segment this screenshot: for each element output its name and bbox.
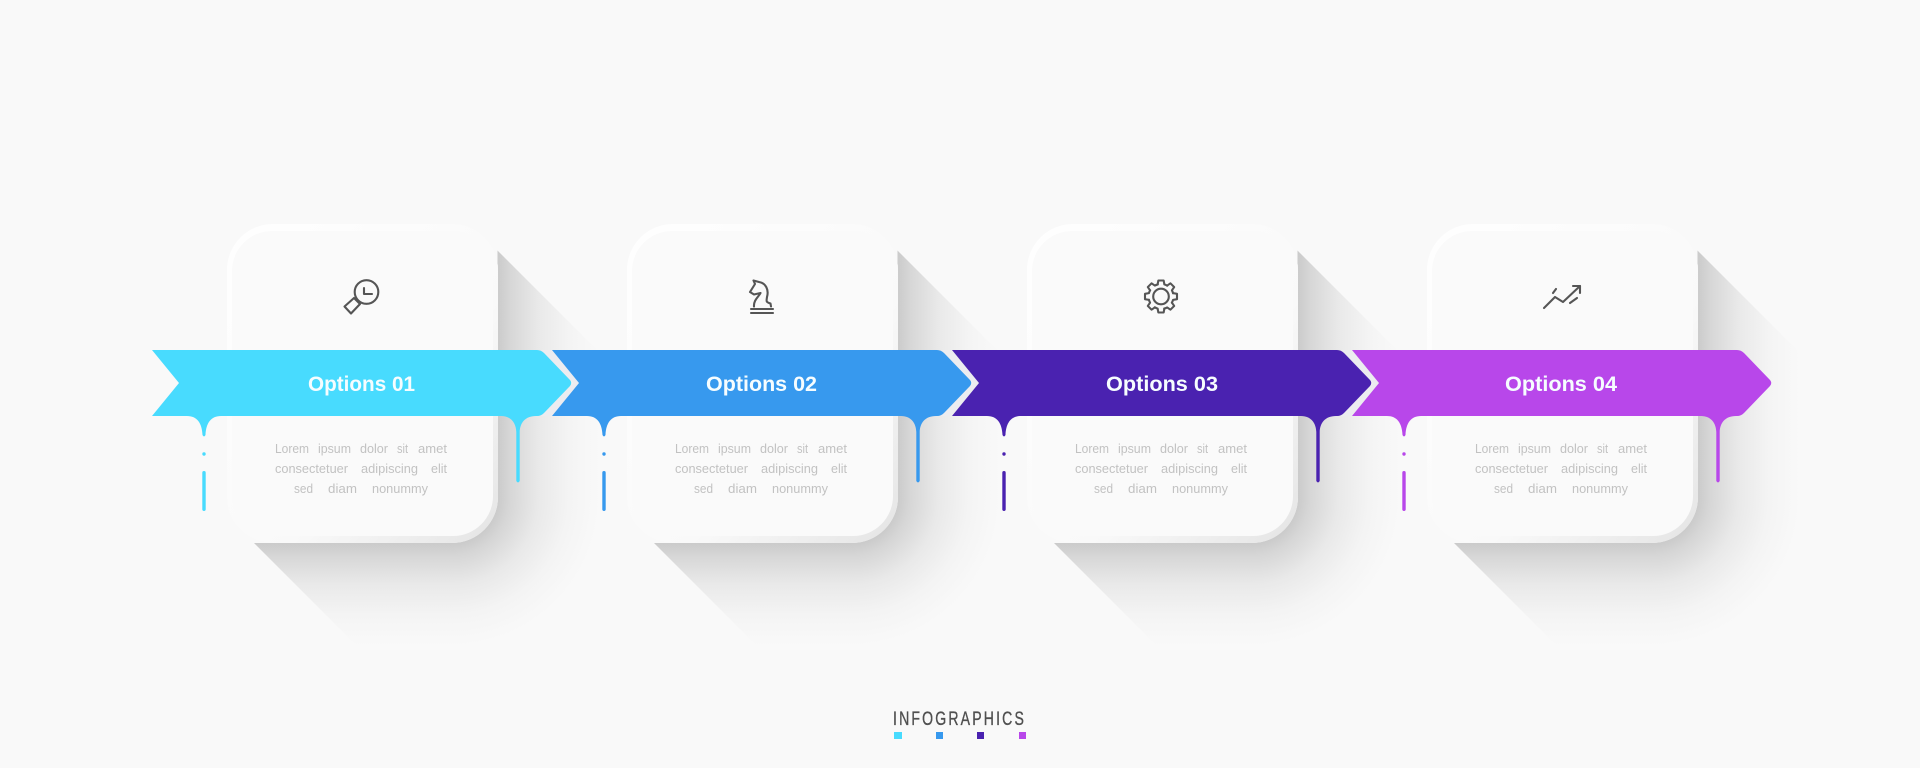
long shadow xyxy=(254,250,600,646)
text block: nonummy xyxy=(372,481,428,496)
icon: trending arrow xyxy=(1544,286,1580,308)
text block: dolor xyxy=(1560,441,1589,456)
connector left xyxy=(1387,416,1421,511)
connector right xyxy=(501,416,536,482)
text block: ipsum xyxy=(1518,441,1551,456)
text block: sit xyxy=(397,441,408,456)
wordmark text: INFOGRAPHICS xyxy=(893,708,1026,730)
text block: Lorem xyxy=(275,441,309,456)
connector right xyxy=(901,416,936,482)
text block: sit xyxy=(797,441,808,456)
panel: options 03 xyxy=(952,224,1400,646)
arrow gap xyxy=(541,350,579,416)
icon: magnifier with clock xyxy=(344,280,378,314)
long shadow xyxy=(1454,250,1800,646)
text block: Lorem xyxy=(675,441,709,456)
legend squares xyxy=(894,732,1026,739)
arrow gap xyxy=(941,350,979,416)
text block: dolor xyxy=(1160,441,1189,456)
text block: diam xyxy=(328,481,357,496)
text block: ipsum xyxy=(1118,441,1151,456)
text block: consectetuer xyxy=(275,461,349,476)
card xyxy=(1427,224,1698,543)
text block: consectetuer xyxy=(1475,461,1549,476)
card xyxy=(1027,224,1298,543)
arrow gap xyxy=(1341,350,1379,416)
text block: amet xyxy=(1218,441,1247,456)
text block: amet xyxy=(818,441,847,456)
text block: ipsum xyxy=(318,441,351,456)
panel: options 04 xyxy=(1352,224,1800,646)
text block: nonummy xyxy=(1172,481,1228,496)
footer: infographics wordmark xyxy=(893,708,1026,739)
text block: adipiscing xyxy=(1561,461,1618,476)
heading: Options 02 xyxy=(706,372,817,396)
text block: dolor xyxy=(360,441,389,456)
ribbon xyxy=(952,350,1371,416)
text block: sed xyxy=(1094,481,1113,496)
long shadow xyxy=(1054,250,1400,646)
text block: consectetuer xyxy=(675,461,749,476)
ribbon xyxy=(552,350,971,416)
card xyxy=(227,224,498,543)
text block: diam xyxy=(728,481,757,496)
text block: sed xyxy=(1494,481,1513,496)
text block: sed xyxy=(694,481,713,496)
text block xyxy=(275,441,447,496)
text block: Lorem xyxy=(1075,441,1109,456)
text block: adipiscing xyxy=(361,461,418,476)
text block: nonummy xyxy=(1572,481,1628,496)
connector left xyxy=(987,416,1021,511)
text block: adipiscing xyxy=(1161,461,1218,476)
text block: ipsum xyxy=(718,441,751,456)
text block: dolor xyxy=(760,441,789,456)
panel: options 02 xyxy=(552,224,1000,646)
ribbon xyxy=(1352,350,1771,416)
panel: options 01 xyxy=(152,224,600,646)
text block: amet xyxy=(1618,441,1647,456)
text block: elit xyxy=(831,461,847,476)
text block: Lorem xyxy=(1475,441,1509,456)
text block: elit xyxy=(431,461,447,476)
heading: Options 04 xyxy=(1505,372,1617,396)
text block: sed xyxy=(294,481,313,496)
connector left xyxy=(187,416,221,511)
connector right xyxy=(1701,416,1736,482)
text block: elit xyxy=(1631,461,1647,476)
text block xyxy=(1475,441,1647,496)
heading: Options 01 xyxy=(308,372,415,396)
heading: Options 03 xyxy=(1106,372,1218,396)
card xyxy=(627,224,898,543)
connector left xyxy=(587,416,621,511)
text block: sit xyxy=(1197,441,1208,456)
text block: adipiscing xyxy=(761,461,818,476)
ribbon xyxy=(152,350,571,416)
text block: diam xyxy=(1528,481,1557,496)
long shadow xyxy=(654,250,1000,646)
text block: elit xyxy=(1231,461,1247,476)
text block: consectetuer xyxy=(1075,461,1149,476)
text block xyxy=(675,441,847,496)
text block: amet xyxy=(418,441,447,456)
text block: diam xyxy=(1128,481,1157,496)
icon: chess knight xyxy=(750,280,773,313)
text block xyxy=(1075,441,1247,496)
connector right xyxy=(1301,416,1336,482)
icon: gear xyxy=(1145,280,1177,312)
text block: nonummy xyxy=(772,481,828,496)
text block: sit xyxy=(1597,441,1608,456)
